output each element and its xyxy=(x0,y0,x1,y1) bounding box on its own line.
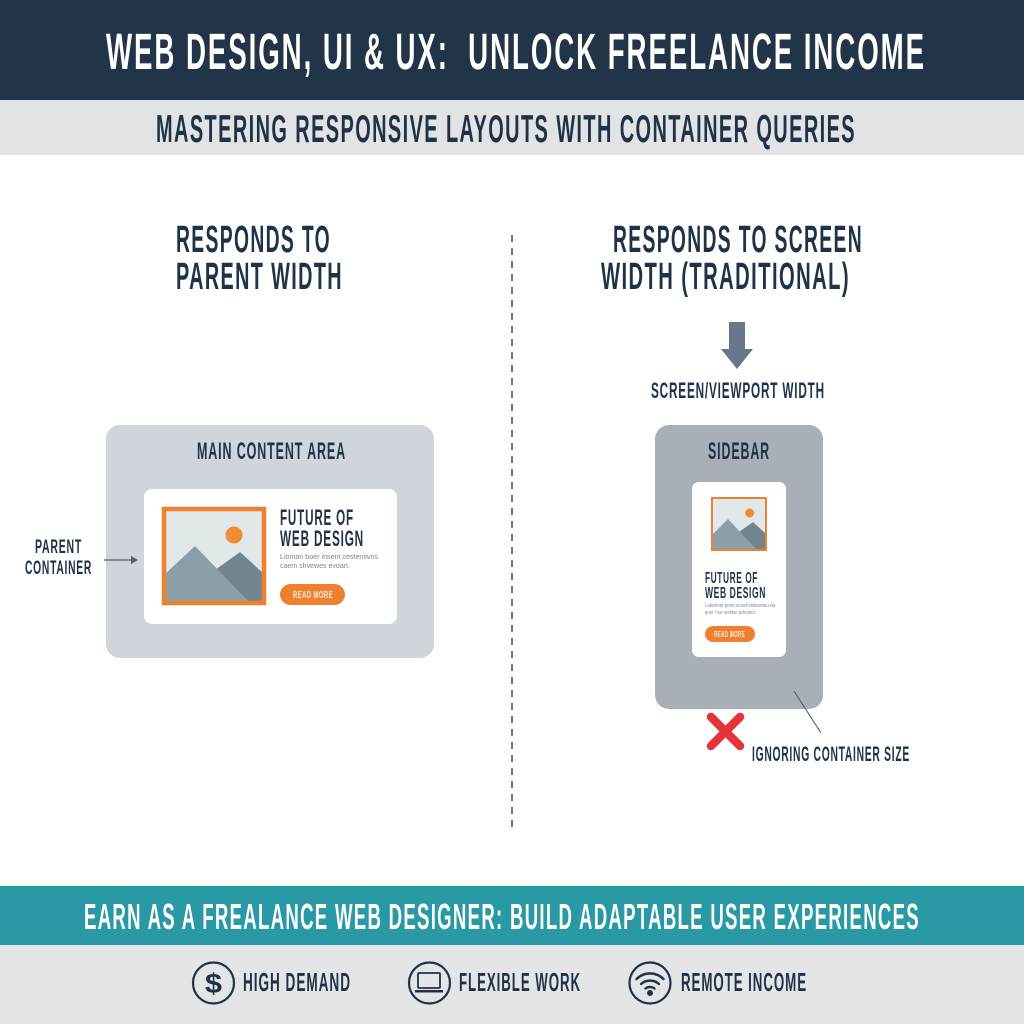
narrow card title: WEB DESIGN xyxy=(705,585,766,602)
narrow card title xyxy=(705,570,766,602)
wide card xyxy=(144,489,397,624)
narrow card image xyxy=(712,498,766,550)
narrow card body text: Lukeriont proin sciunt dolcentou na xyxy=(705,603,776,609)
benefit: flexible work xyxy=(409,962,581,1004)
panel heading: MAIN CONTENT AREA xyxy=(197,438,346,465)
card title: WEB DESIGN xyxy=(280,526,364,551)
panel: main content area xyxy=(106,425,434,658)
icon: wifi xyxy=(630,962,670,1004)
arrow: parent container xyxy=(104,556,138,564)
subtitle band xyxy=(0,100,1024,155)
heading: responds to parent width xyxy=(176,219,343,298)
card image xyxy=(164,509,264,603)
heading: responds to parent width: RESPONDS TO xyxy=(176,219,331,261)
label: parent container: PARENT xyxy=(35,537,82,558)
label: parent container xyxy=(25,537,92,579)
card body text: Lioman boer insent cestentivns xyxy=(280,552,378,561)
benefit: remote income xyxy=(630,962,807,1004)
narrow card xyxy=(692,482,786,657)
card body text: caem shvewes evoart. xyxy=(280,561,350,570)
icon: dollar: $ xyxy=(205,968,222,999)
sidebar heading: SIDEBAR xyxy=(708,438,770,465)
label: parent container: CONTAINER xyxy=(25,558,92,579)
panel: sidebar xyxy=(655,425,823,709)
title banner xyxy=(0,0,1024,100)
button: read more xyxy=(280,584,345,605)
high demand label: HIGH DEMAND xyxy=(243,967,351,997)
remote income label: REMOTE INCOME xyxy=(681,967,807,997)
button: read more small xyxy=(705,626,755,642)
narrow card title: FUTURE OF xyxy=(705,570,758,587)
benefit: high demand xyxy=(193,962,351,1004)
call to action band xyxy=(0,886,1024,945)
card title: FUTURE OF xyxy=(280,505,354,530)
leader line xyxy=(794,691,821,733)
heading: responds to parent width: PARENT WIDTH xyxy=(176,256,343,298)
card body text xyxy=(280,552,378,570)
button: read more small: READ MORE xyxy=(714,630,745,639)
icon: red cross xyxy=(711,717,740,746)
icon: laptop xyxy=(409,962,450,1004)
heading: responds to screen width xyxy=(601,219,863,298)
narrow card body text: quer r ice sumtse pdrudrot. xyxy=(705,610,756,616)
benefits band xyxy=(0,945,1024,1024)
narrow card body text xyxy=(705,603,776,616)
flexible work label: FLEXIBLE WORK xyxy=(459,967,581,997)
arrow: screen width down xyxy=(721,322,753,369)
button: read more: READ MORE xyxy=(293,589,333,601)
card title xyxy=(280,505,364,551)
icon: dollar xyxy=(193,962,234,1004)
label: screen/viewport width: SCREEN/VIEWPORT WIDTH xyxy=(651,378,825,403)
